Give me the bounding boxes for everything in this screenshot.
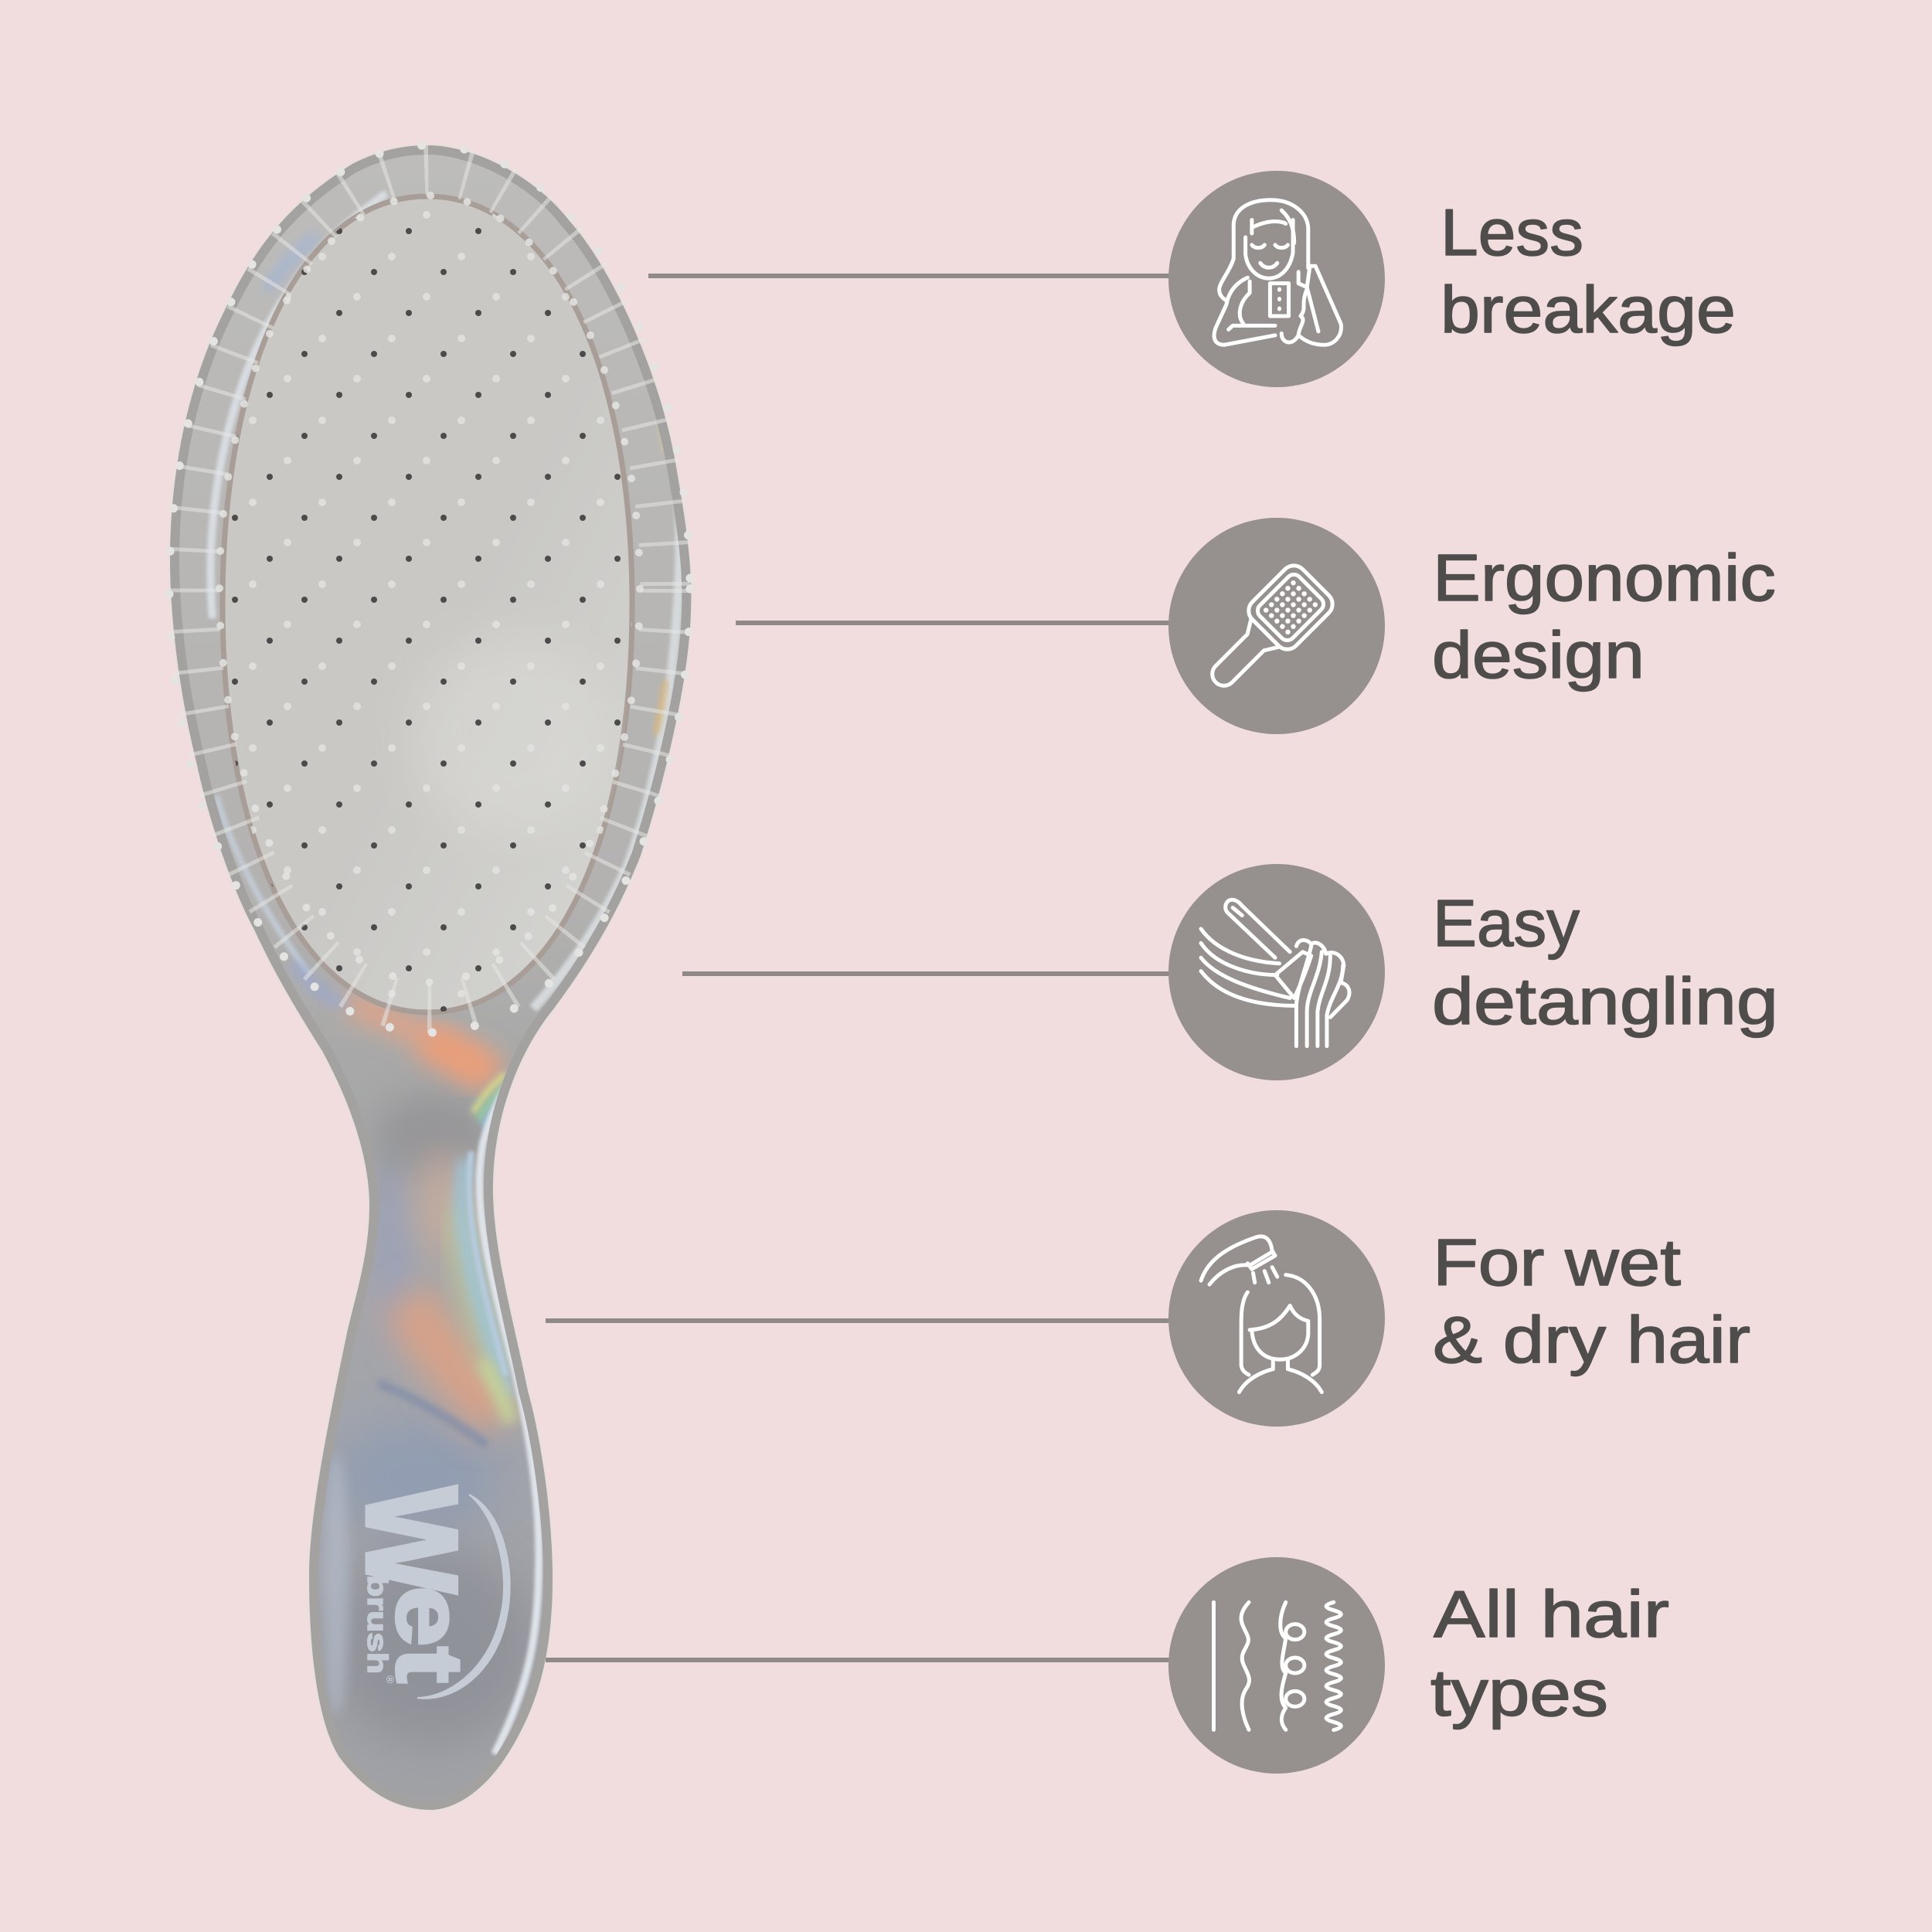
label line: types [1430,1657,1608,1730]
icon circle 4 [1168,1210,1385,1427]
icon: shower over head [1201,1236,1321,1392]
connector line 5 [546,1658,1170,1662]
feature 5: all hair types [1168,1557,1669,1774]
label line: Less [1440,196,1583,270]
bristle holes [216,193,641,1020]
connector line 1 [648,274,1170,278]
label: less breakage [1440,196,1736,347]
logo swoosh [417,1495,510,1699]
connector line 2 [736,621,1170,625]
logo brush: brush [362,1575,393,1674]
label: ergonomic design [1432,542,1776,692]
feature 3: easy detangling [1168,864,1778,1080]
label line: design [1432,619,1645,692]
logo registered mark: ® [384,1675,396,1684]
icon circle 5 [1168,1557,1385,1774]
label line: detangling [1432,965,1778,1039]
icon circle 3 [1168,864,1385,1080]
label line: Easy [1433,887,1580,961]
bristles around the cushion [169,145,690,1032]
label: all hair types [1430,1578,1669,1730]
icon: woman brushing hair [1214,200,1341,345]
mesh cushion [216,193,641,1020]
label line: & dry hair [1433,1304,1750,1377]
icon: hair type lines [1214,1602,1341,1730]
feature 4: for wet and dry hair [1168,1210,1750,1427]
icon: comb in hair [1201,900,1349,1046]
cushion light patch [442,671,533,782]
icon circle 1 [1168,171,1385,387]
brush illustration [169,145,691,1810]
label line: All hair [1434,1578,1669,1651]
logo W: W [339,1486,485,1594]
label line: Ergonomic [1433,542,1776,615]
label line: For wet [1433,1226,1681,1300]
feature 2: ergonomic design [1168,518,1776,734]
icon circle 2 [1168,518,1385,734]
connector line 3 [682,971,1170,976]
label line: breakage [1440,274,1736,347]
label: for wet and dry hair [1433,1226,1750,1377]
connector line 4 [546,1318,1170,1323]
feature 1: less breakage [1168,171,1736,387]
label: easy detangling [1432,887,1778,1039]
icon: paddle brush [1194,560,1338,704]
left silver highlight [210,193,386,618]
outer rim [170,145,691,1810]
logo et: et [377,1586,482,1683]
holographic reflections [170,145,691,1810]
logo: Wet brush [339,1486,510,1699]
brush body [170,145,691,1810]
right silver highlight [474,1082,543,1757]
